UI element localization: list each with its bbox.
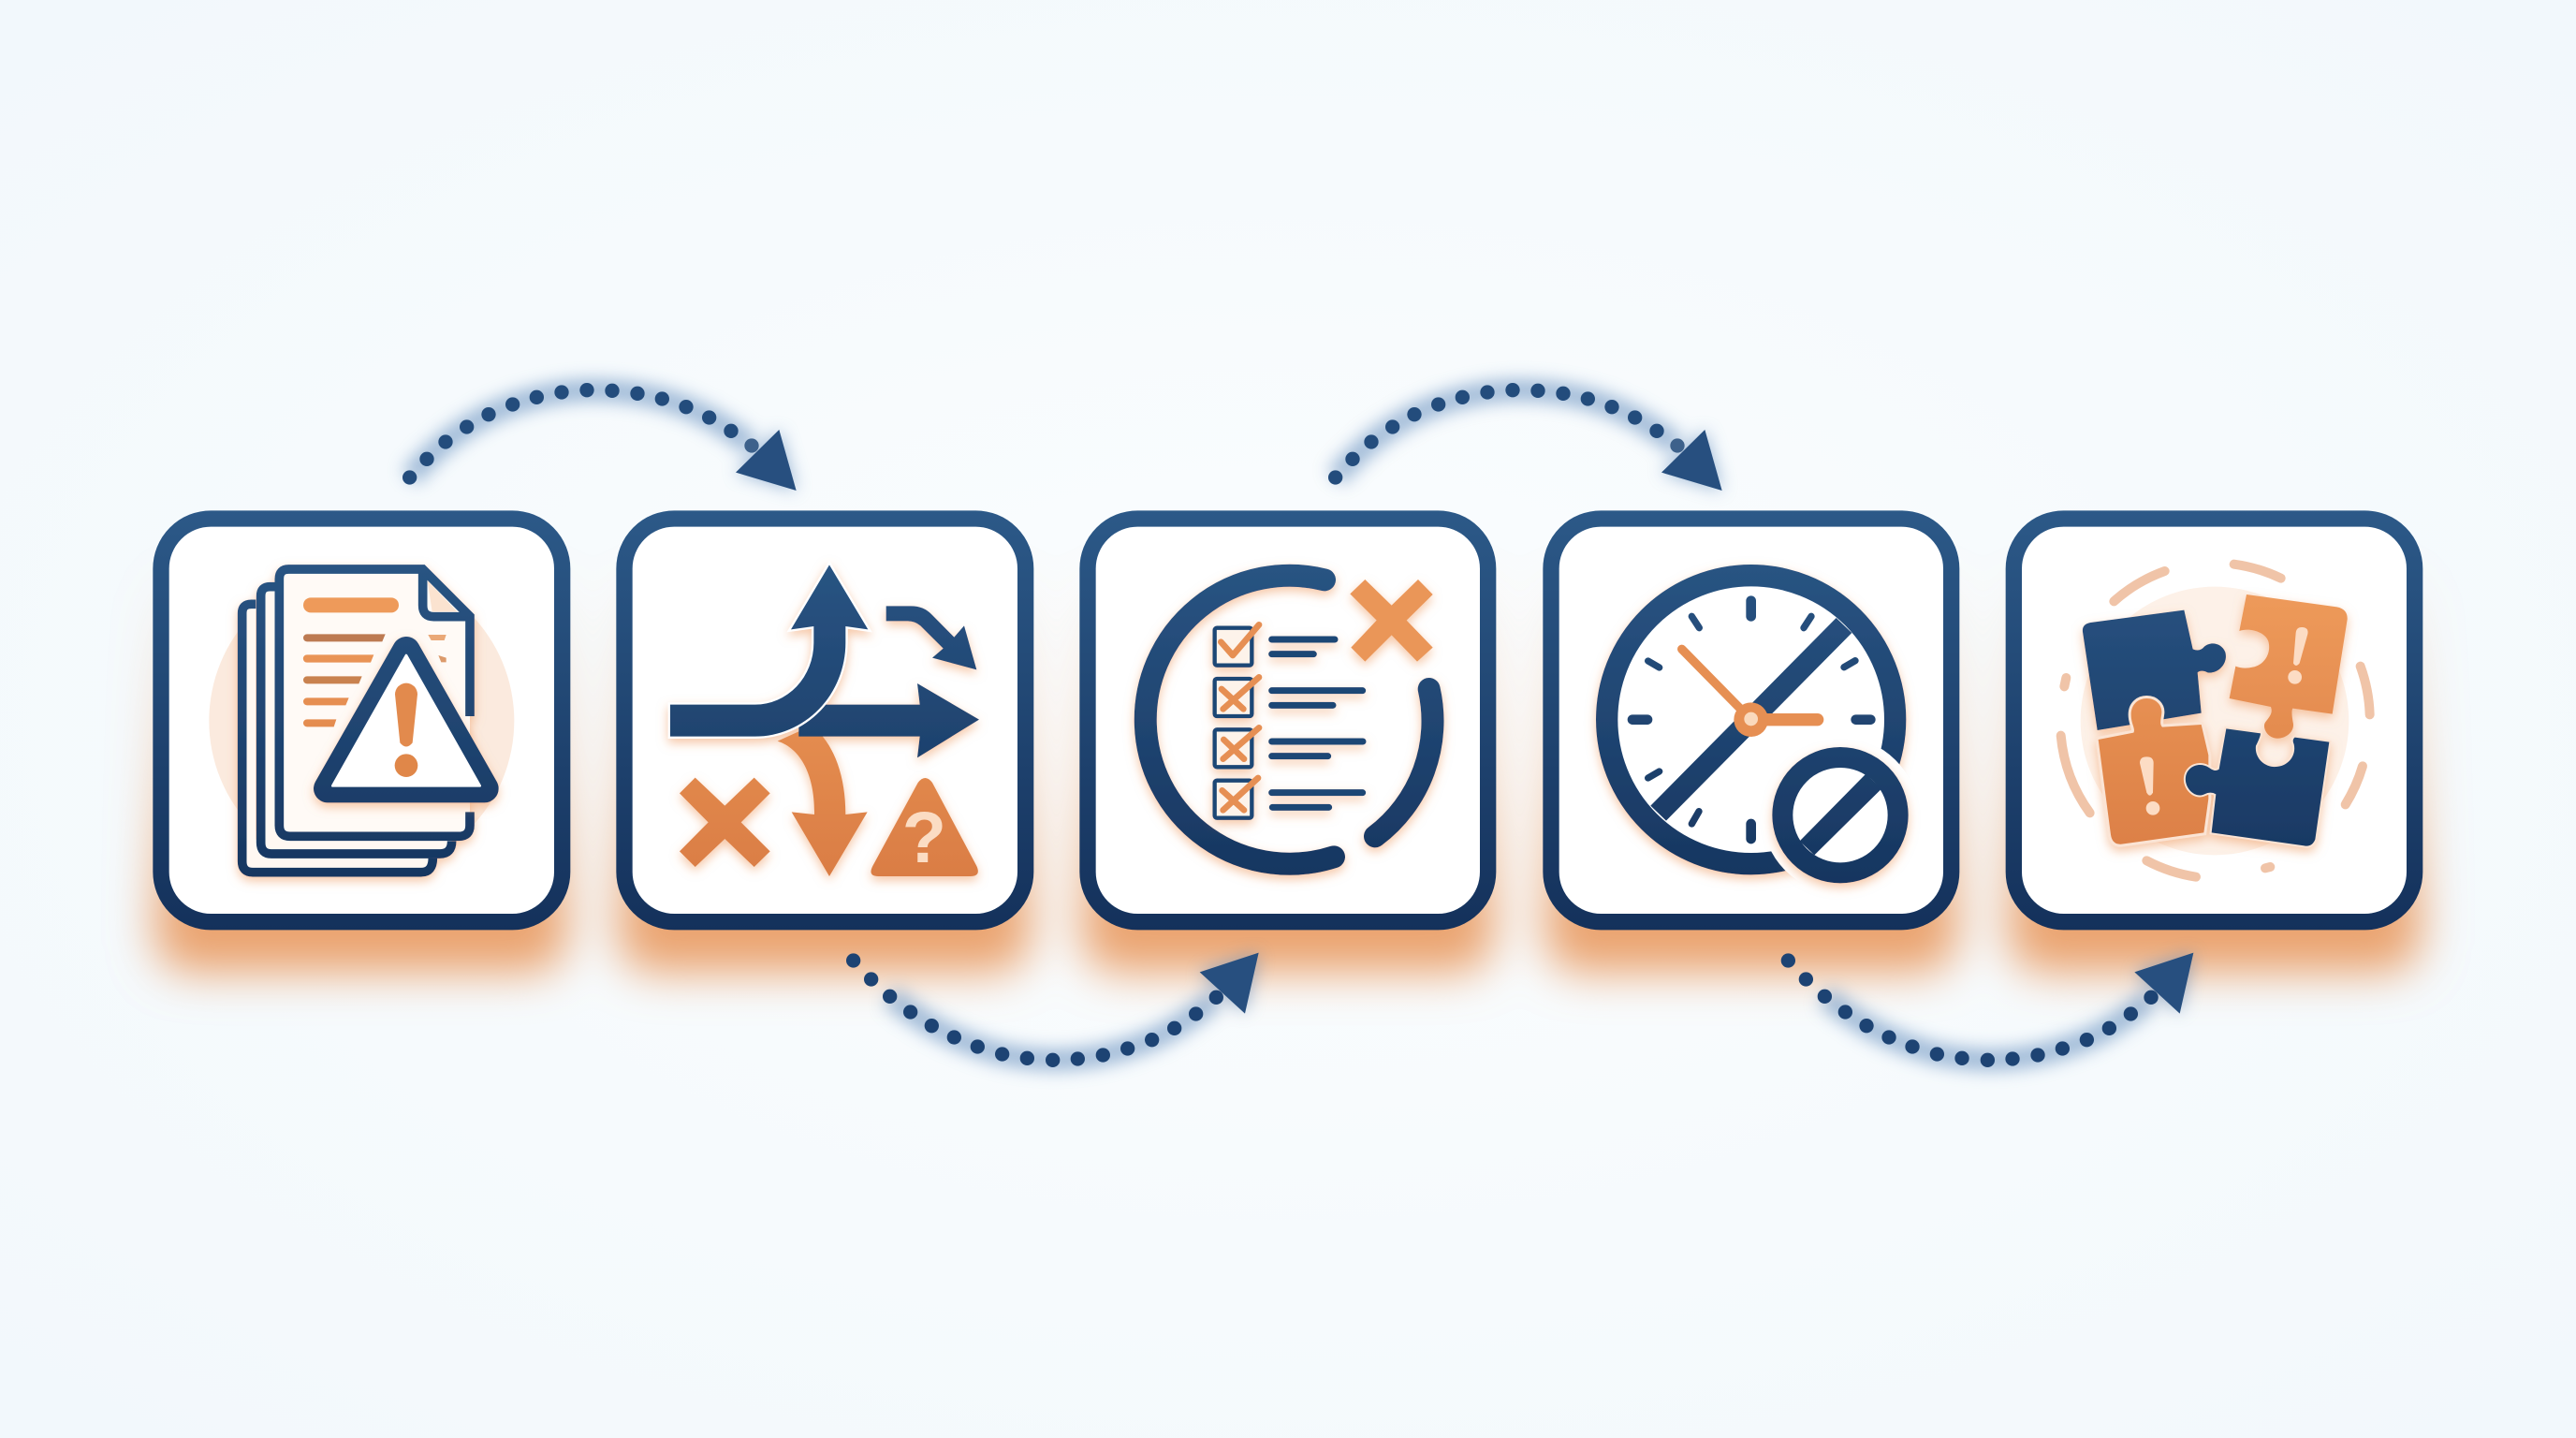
icon: diverging arrows [670,565,979,876]
panel: document warning card [161,519,563,922]
arrow: step 2 to step 3 [846,953,1259,1067]
document text lines [303,597,446,726]
icon: puzzle pieces [2083,594,2348,846]
panel: puzzle card [2013,519,2415,922]
arrow: step 1 to step 2 [402,383,797,491]
arrow: step 3 to step 4 [1328,383,1722,491]
checklist rows [1215,624,1363,818]
icon: crossed clock [1607,576,1895,864]
icon: stacked documents [242,569,470,873]
icon: orange cross [680,778,770,867]
panel: diverging paths card [624,519,1026,922]
icon: question triangle: ? [902,798,946,878]
panel: clock card [1551,519,1952,922]
arrow: step 4 to step 5 [1781,953,2193,1067]
orange card glows [154,562,2422,972]
icon: broken ring [1146,576,1433,864]
icon: prohibited badge [1763,737,1918,893]
icon: question triangle [871,778,978,878]
scattered dashes [2061,565,2370,877]
icon: large cross [1350,580,1433,662]
panel: checklist card [1088,519,1488,922]
icon: warning triangle [328,651,485,788]
